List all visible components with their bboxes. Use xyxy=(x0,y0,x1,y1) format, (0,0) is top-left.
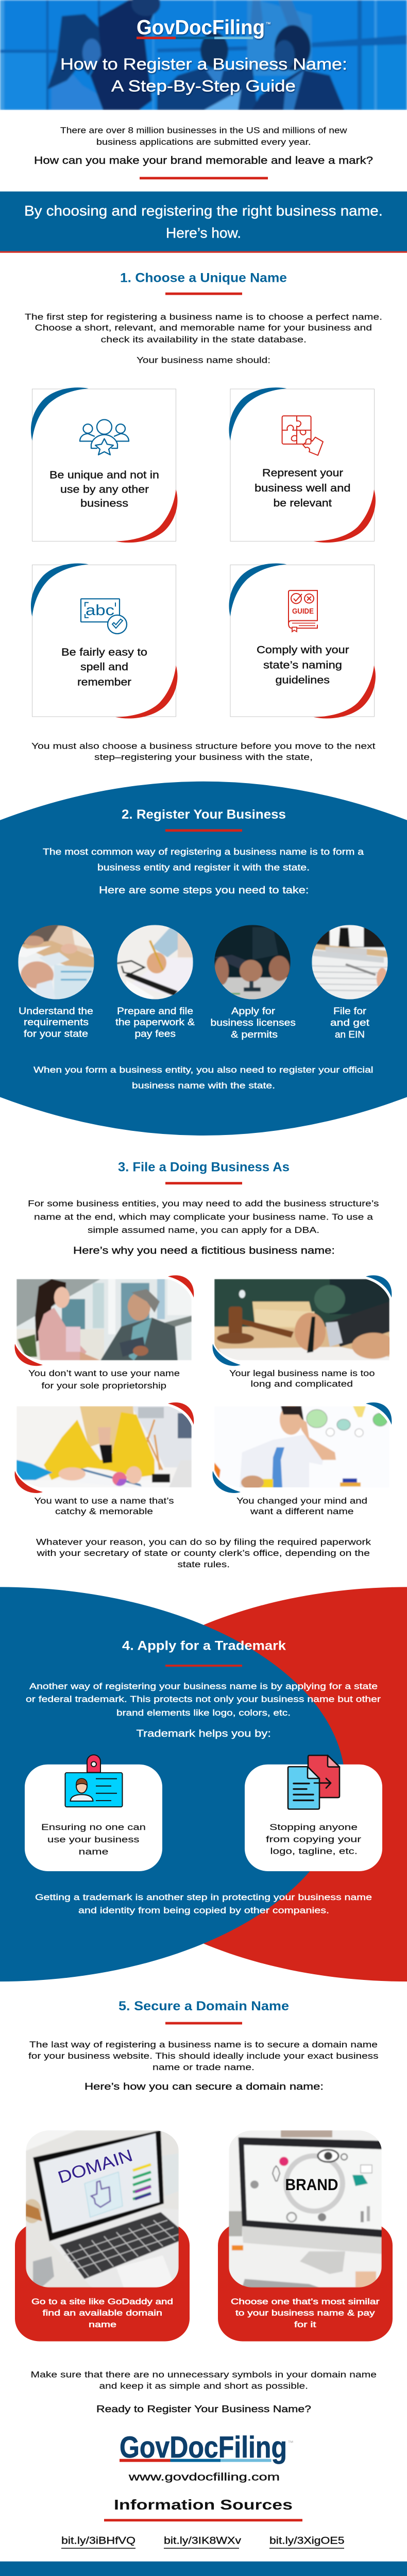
caption: long and complicated xyxy=(251,1379,353,1389)
caption: Prepare and file xyxy=(117,1006,193,1016)
footer logo: GovDocFiling xyxy=(120,2430,287,2464)
card text xyxy=(61,647,147,688)
section 2 heading xyxy=(122,807,286,832)
section 5 heading xyxy=(118,1999,289,2024)
caption: pay fees xyxy=(135,1028,176,1039)
section 1 intro text: The first step for registering a business name is to choose a perfect name. xyxy=(25,312,382,321)
section 3 intro text: For some business entities, you may need to add the business structure’s xyxy=(28,1198,379,1208)
photo: laptop DOMAIN xyxy=(23,2130,179,2287)
decorative swoosh: blue corners xyxy=(213,1402,392,1493)
section 2 closing text xyxy=(33,1064,374,1091)
section 5 intro text: name or trade name. xyxy=(152,2062,255,2072)
photo: gavel and signing xyxy=(214,1279,395,1360)
card text: business well and xyxy=(255,482,350,494)
section 5 intro text: for your business website. This should ideally include your exact business xyxy=(28,2051,378,2061)
section 2 heading: 2. Register Your Business xyxy=(122,807,286,822)
logo underline tricolor xyxy=(137,37,253,39)
card text: state’s naming xyxy=(263,659,342,671)
caption: find an available domain xyxy=(43,2309,162,2318)
section 5 intro text: The last way of registering a business name is to secure a domain name xyxy=(29,2040,378,2049)
section 3 intro text: name at the end, which may complicate your business name. To use a xyxy=(34,1212,373,1222)
caption xyxy=(28,1368,180,1391)
banner: by choosing: By choosing and registering the right business name. xyxy=(24,203,383,218)
caption xyxy=(236,1496,367,1516)
caption: Choose one that’s most similar xyxy=(231,2297,380,2306)
photo: monitor BRAND xyxy=(229,2130,382,2287)
caption: File for xyxy=(333,1006,366,1016)
logo: GovDocFiling white: GovDocFiling xyxy=(137,15,265,39)
card: stopping anyone from copying xyxy=(245,1755,382,1871)
section 3 closing text: state rules. xyxy=(177,1559,230,1569)
card text xyxy=(255,467,350,509)
intro text xyxy=(60,126,347,147)
caption: for it xyxy=(294,2320,316,2329)
footer logo: TM xyxy=(288,2441,293,2444)
caption: You want to use a name that’s xyxy=(34,1496,174,1505)
banner: by choosing: Here’s how. xyxy=(166,225,241,241)
caption: business licenses xyxy=(210,1017,296,1028)
reason 4: changed mind xyxy=(213,1402,392,1516)
panel: section 4 red and blue lens xyxy=(0,1587,407,1981)
section 4 subheading: Trademark helps you by: xyxy=(136,1728,271,1739)
section 1 intro text: Your business name should: xyxy=(137,355,270,365)
hero photo: team meeting in blue duotone xyxy=(0,0,407,110)
caption xyxy=(34,1496,174,1516)
card text: Ensuring no one can xyxy=(41,1822,146,1832)
section 4 intro text: Another way of registering your business name is by applying for a state xyxy=(29,1681,378,1691)
card: choose one xyxy=(218,2130,393,2341)
caption xyxy=(229,1368,375,1389)
icon: guide book xyxy=(289,590,317,632)
section 1 intro text xyxy=(25,312,382,365)
caption xyxy=(31,2297,173,2329)
title: How to Register a Business Name: xyxy=(60,55,347,73)
section 2 closing text: When you form a business entity, you also need to register your official xyxy=(33,1064,374,1075)
caption: the paperwork & xyxy=(115,1016,195,1027)
section 4 closing text: and identity from being copied by other companies. xyxy=(78,1905,329,1915)
card text: use your business xyxy=(47,1834,140,1844)
source links: bit.ly/3XigOE5 xyxy=(269,2535,345,2547)
caption: Understand the xyxy=(19,1006,93,1016)
card: ensuring no one can use xyxy=(25,1755,162,1871)
caption: an EIN xyxy=(335,1029,365,1040)
card text: Represent your xyxy=(262,467,343,479)
card text: Stopping anyone xyxy=(269,1822,358,1832)
section 1 heading: 1. Choose a Unique Name xyxy=(120,271,287,285)
caption: You changed your mind and xyxy=(236,1496,367,1505)
hero banner xyxy=(0,0,407,110)
icon: ID badge xyxy=(65,1755,123,1807)
card: represent xyxy=(229,387,376,543)
icon: copying documents xyxy=(288,1755,340,1809)
section 5 subheading: Here’s how you can secure a domain name: xyxy=(84,2081,324,2092)
call to action: Ready to Register Your Business Name? xyxy=(96,2403,311,2414)
step 2: prepare paperwork xyxy=(115,925,195,1039)
caption: for your sole proprietorship xyxy=(41,1380,166,1391)
information sources heading xyxy=(104,2497,302,2521)
section 4 closing text xyxy=(35,1892,372,1915)
card text xyxy=(41,1822,146,1856)
card: be unique xyxy=(31,387,177,543)
logo: GovDocFiling white: TM xyxy=(266,22,270,25)
card text xyxy=(266,1822,361,1856)
caption xyxy=(19,1006,93,1039)
section 3 intro text: simple assumed name, you can apply for a DBA. xyxy=(88,1225,319,1235)
source links: bit.ly/3IK8WXv xyxy=(164,2535,241,2547)
section 1 intro text: check its availability in the state database. xyxy=(101,334,307,344)
section 5 closing text: Make sure that there are no unnecessary symbols in your domain name xyxy=(31,2370,377,2380)
card text: from copying your xyxy=(266,1834,361,1844)
section 5 intro text xyxy=(28,2040,378,2072)
photo: W-9 clipboard xyxy=(312,925,388,1000)
section 4 intro text: brand elements like logo, colors, etc. xyxy=(116,1707,291,1718)
step 1: understand requirements xyxy=(18,925,94,1039)
website url: www.govdocfilling.com xyxy=(128,2472,280,2483)
step 3: apply for licenses xyxy=(210,925,296,1040)
intro text: There are over 8 million businesses in the US and millions of new xyxy=(60,126,347,135)
photo: man thinking xyxy=(214,1404,389,1489)
caption: and get xyxy=(330,1017,369,1028)
photo: handshake xyxy=(16,1279,192,1360)
section 2 intro text xyxy=(43,846,364,872)
photo: stamp xyxy=(214,925,291,1000)
caption xyxy=(330,1006,369,1040)
card text: spell and xyxy=(80,661,128,673)
icon: puzzle xyxy=(282,416,323,455)
caption: Your legal business name is too xyxy=(229,1368,375,1378)
card text: guidelines xyxy=(275,674,330,686)
card text xyxy=(257,644,349,686)
icon: abc check xyxy=(81,599,127,634)
section 1 intro text: Choose a short, relevant, and memorable name for your business and xyxy=(35,323,372,332)
card: comply xyxy=(229,564,376,719)
reason 1: sole proprietorship xyxy=(15,1275,194,1391)
section 4 closing text: Getting a trademark is another step in protecting your business name xyxy=(35,1892,372,1902)
section 4 heading: 4. Apply for a Trademark xyxy=(122,1639,286,1653)
icon: guide book: GUIDE xyxy=(292,607,314,616)
caption: Apply for xyxy=(231,1006,275,1016)
section 3 heading xyxy=(118,1160,290,1184)
caption: requirements xyxy=(24,1016,89,1027)
section 5 closing text xyxy=(31,2370,377,2391)
section 1 closing text: step–registering your business with the state, xyxy=(94,752,313,762)
banner: by choosing xyxy=(0,192,407,253)
decorative swoosh: blue corners xyxy=(213,1275,392,1366)
section 3 closing text xyxy=(36,1537,371,1569)
photo: monitor BRAND: BRAND xyxy=(285,2175,338,2194)
card text: logo, tagline, etc. xyxy=(270,1846,358,1856)
section 1 closing text: You must also choose a business structure before you move to the next xyxy=(31,741,376,751)
caption: want a different name xyxy=(250,1506,354,1516)
card text xyxy=(49,469,159,510)
card text: Comply with your xyxy=(257,644,349,656)
card: go to a site xyxy=(15,2130,190,2341)
caption: catchy & memorable xyxy=(55,1506,153,1516)
photo: signing papers xyxy=(117,925,193,1000)
card text: Be unique and not in xyxy=(49,469,159,481)
caption: for your state xyxy=(24,1028,88,1039)
section 3 heading: 3. File a Doing Business As xyxy=(118,1160,290,1175)
caption xyxy=(210,1006,296,1040)
section 4 heading xyxy=(122,1639,286,1667)
card: easy to spell xyxy=(31,564,177,719)
intro text: business applications are submitted every year. xyxy=(96,137,311,147)
card text: remember xyxy=(77,676,131,688)
title: A Step-By-Step Guide xyxy=(111,77,296,95)
section 1 closing text xyxy=(31,741,376,762)
photo: woman in yellow xyxy=(16,1406,192,1488)
caption: & permits xyxy=(231,1029,278,1040)
card text: business xyxy=(80,498,128,510)
section 2 intro text: business entity and register it with the state. xyxy=(97,862,310,872)
section 4 intro text: or federal trademark. This protects not only your business name but other xyxy=(26,1694,381,1704)
card text: be relevant xyxy=(273,497,332,509)
section 3 subheading: Here’s why you need a fictitious business name: xyxy=(73,1245,335,1257)
card text: use by any other xyxy=(60,484,149,495)
intro question: How can you make your brand memorable and leave a mark? xyxy=(34,155,373,166)
panel: section 2 blue lens xyxy=(0,782,407,1136)
icon: abc check: abc xyxy=(86,602,114,619)
reason 3: catchy name xyxy=(15,1402,194,1516)
section 5 heading: 5. Secure a Domain Name xyxy=(118,1999,289,2013)
photo: laptop DOMAIN: DOMAIN xyxy=(56,2146,135,2188)
photo: meeting at desk xyxy=(18,925,94,1000)
caption: You don’t want to use your name xyxy=(28,1368,180,1378)
icon: people with star xyxy=(80,419,129,455)
source links: bit.ly/3iBHfVQ xyxy=(61,2535,135,2547)
section 4 intro text xyxy=(26,1681,381,1718)
card text: Be fairly easy to xyxy=(61,647,147,658)
source links xyxy=(61,2535,345,2549)
information sources heading: Information Sources xyxy=(114,2497,293,2513)
section 2 subheading: Here are some steps you need to take: xyxy=(99,885,309,896)
title xyxy=(60,55,347,95)
card text: name xyxy=(78,1846,108,1856)
section 3 closing text: with your secretary of state or county clerk’s office, depending on the xyxy=(36,1548,370,1558)
caption: Go to a site like GoDaddy and xyxy=(31,2297,173,2306)
section 3 intro text xyxy=(28,1198,379,1235)
section 3 closing text: Whatever your reason, you can do so by filing the required paperwork xyxy=(36,1537,371,1547)
caption: to your business name & pay xyxy=(235,2309,376,2318)
caption xyxy=(115,1006,195,1039)
reason 2: legal name too long xyxy=(213,1275,395,1389)
section 2 closing text: business name with the state. xyxy=(132,1080,275,1091)
footer bar xyxy=(0,2562,407,2576)
caption: name xyxy=(89,2320,116,2329)
section 5 closing text: and keep it as simple and short as possible. xyxy=(99,2381,308,2391)
section 1 heading xyxy=(120,271,287,295)
step 4: file for EIN xyxy=(312,925,388,1040)
caption xyxy=(231,2297,380,2329)
decorative swoosh: red corners xyxy=(15,1402,194,1493)
decorative swoosh: red corners xyxy=(15,1275,194,1366)
section 2 intro text: The most common way of registering a business name is to form a xyxy=(43,846,364,857)
